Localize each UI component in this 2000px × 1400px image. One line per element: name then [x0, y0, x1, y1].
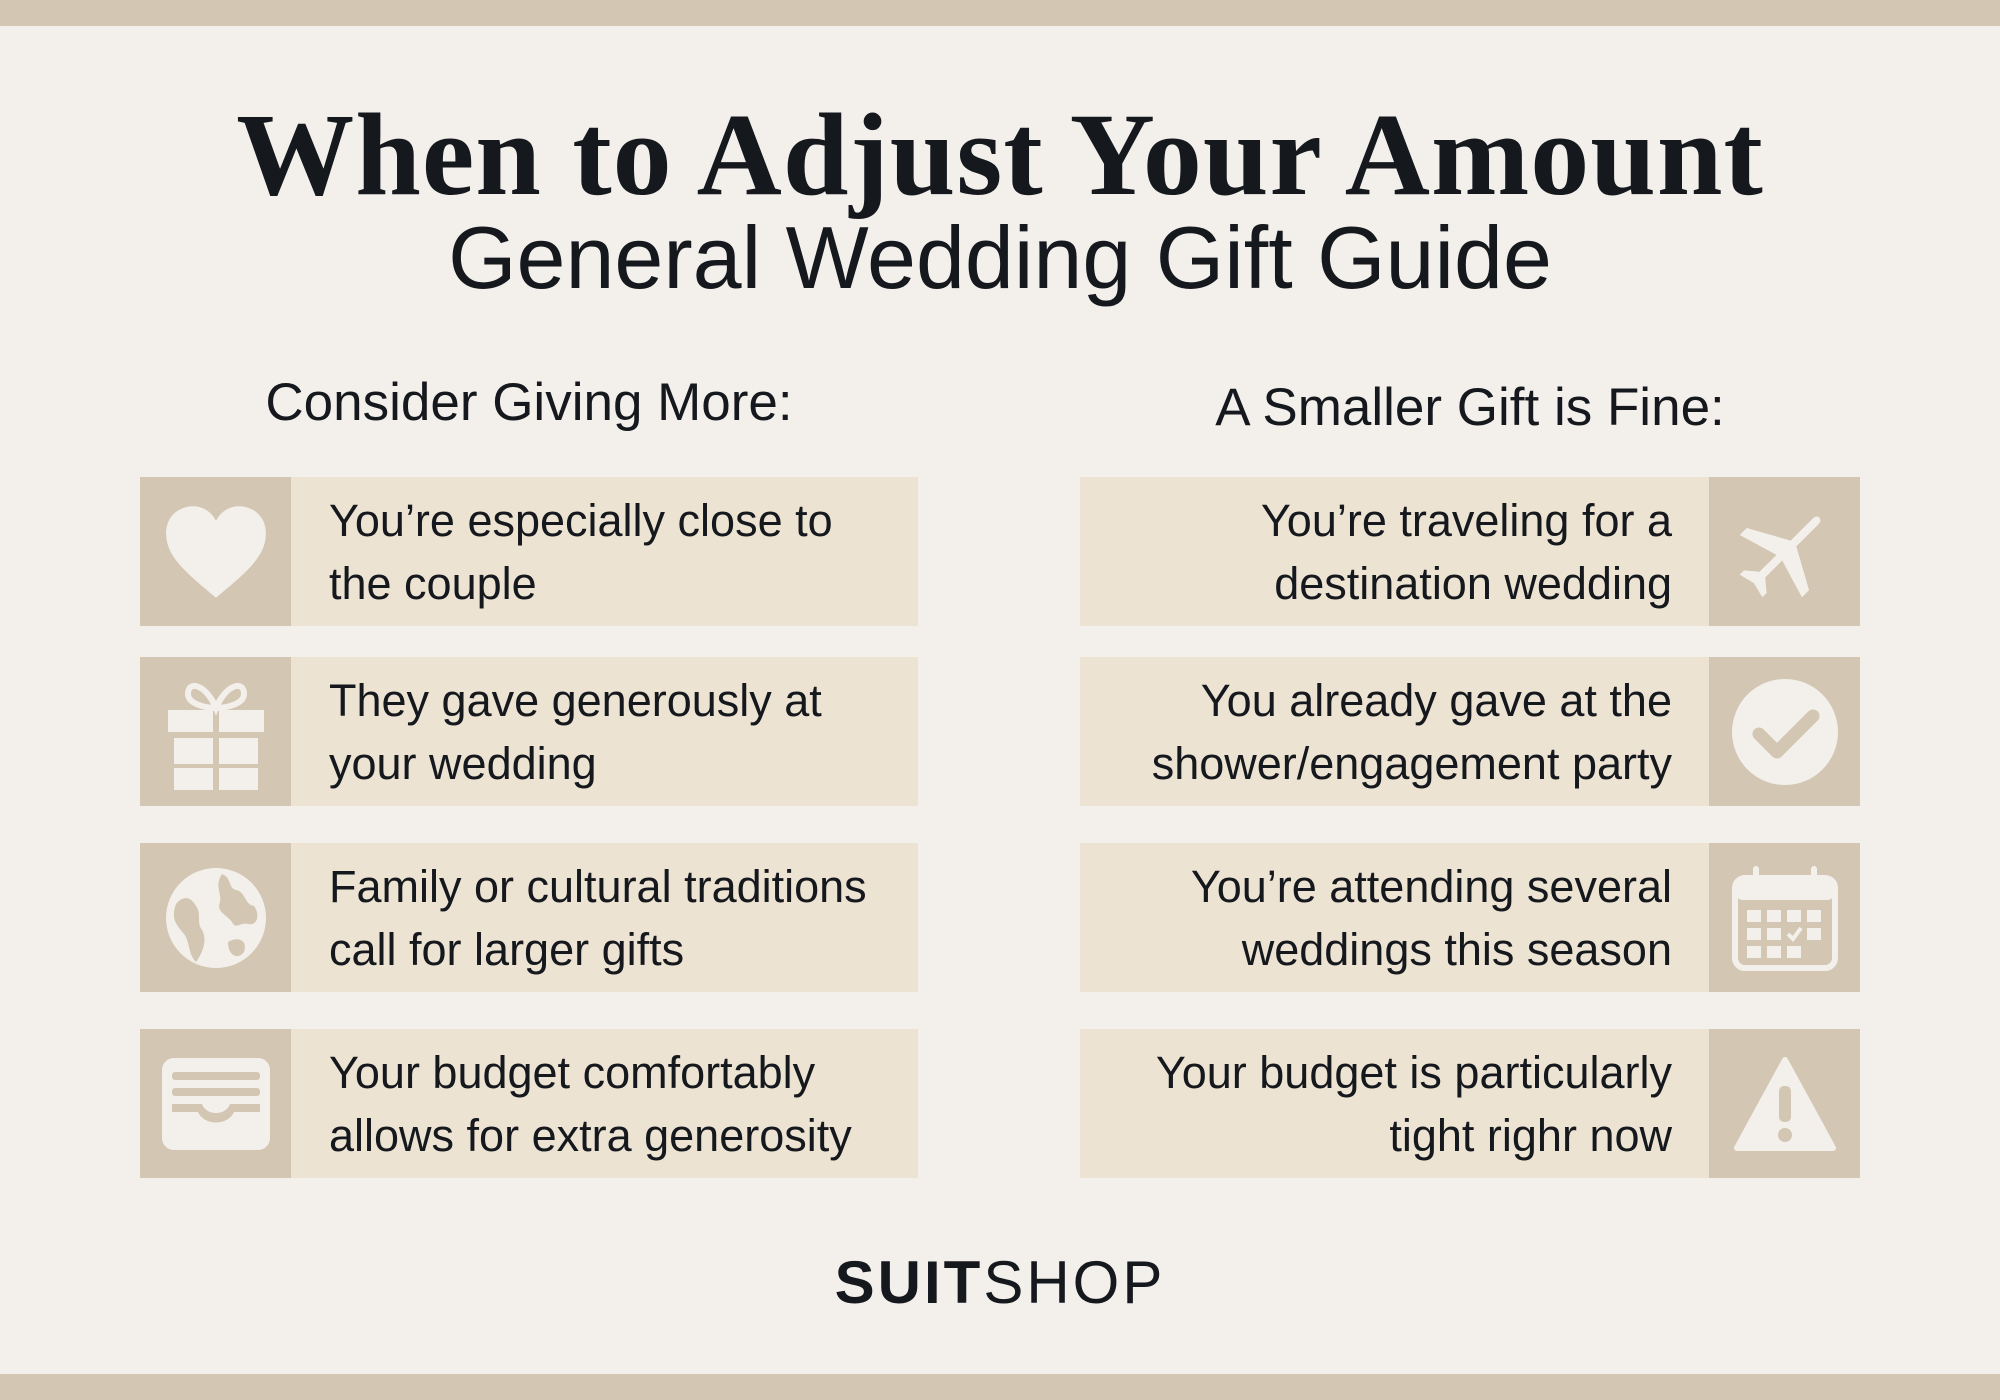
text: destination wedding [1274, 558, 1672, 608]
icon: heart [140, 477, 291, 626]
icon: check circle [1709, 657, 1860, 806]
text: Family or cultural traditions [329, 860, 867, 912]
text [1152, 674, 1672, 788]
text: You’re attending several [1191, 860, 1672, 912]
text: allows for extra generosity [329, 1110, 852, 1160]
row: gave generously [140, 657, 918, 806]
icon: calendar [1709, 843, 1860, 992]
text: Your budget is particularly [1156, 1046, 1672, 1098]
text: Your budget comfortably [329, 1046, 815, 1098]
text [329, 860, 867, 974]
title: When to Adjust Your Amount [236, 89, 1764, 220]
text: You’re traveling for a [1261, 494, 1672, 546]
row: tight budget [1080, 1029, 1860, 1178]
icon: wallet [140, 1029, 291, 1178]
text: weddings this season [1242, 924, 1672, 974]
icon: airplane [1709, 477, 1860, 626]
text [329, 1046, 852, 1160]
text [1156, 1046, 1672, 1160]
logo: SUITSHOP [835, 1249, 1165, 1316]
icon: gift [140, 657, 291, 806]
row: already gave [1080, 657, 1860, 806]
text: You’re especially close to [329, 494, 833, 546]
text: tight righr now [1389, 1110, 1672, 1160]
text [1191, 860, 1672, 974]
row: close to couple [140, 477, 918, 626]
text [329, 674, 822, 788]
heading: smaller gift is fine: A Smaller Gift is Fine: [1215, 378, 1725, 437]
text: call for larger gifts [329, 924, 684, 974]
text [329, 494, 833, 608]
text: You already gave at the [1201, 674, 1672, 726]
row: several weddings [1080, 843, 1860, 992]
row: traditions [140, 843, 918, 992]
text: the couple [329, 558, 537, 608]
icon: warning [1709, 1029, 1860, 1178]
text: shower/engagement party [1152, 738, 1672, 788]
text [1261, 494, 1672, 608]
text: They gave generously at [329, 674, 822, 726]
icon: globe [140, 843, 291, 992]
row: destination wedding [1080, 477, 1860, 626]
heading: consider giving more: Consider Giving More: [265, 373, 793, 432]
subtitle: General Wedding Gift Guide [448, 208, 1552, 307]
text: your wedding [329, 738, 597, 788]
row: budget allows [140, 1029, 918, 1178]
